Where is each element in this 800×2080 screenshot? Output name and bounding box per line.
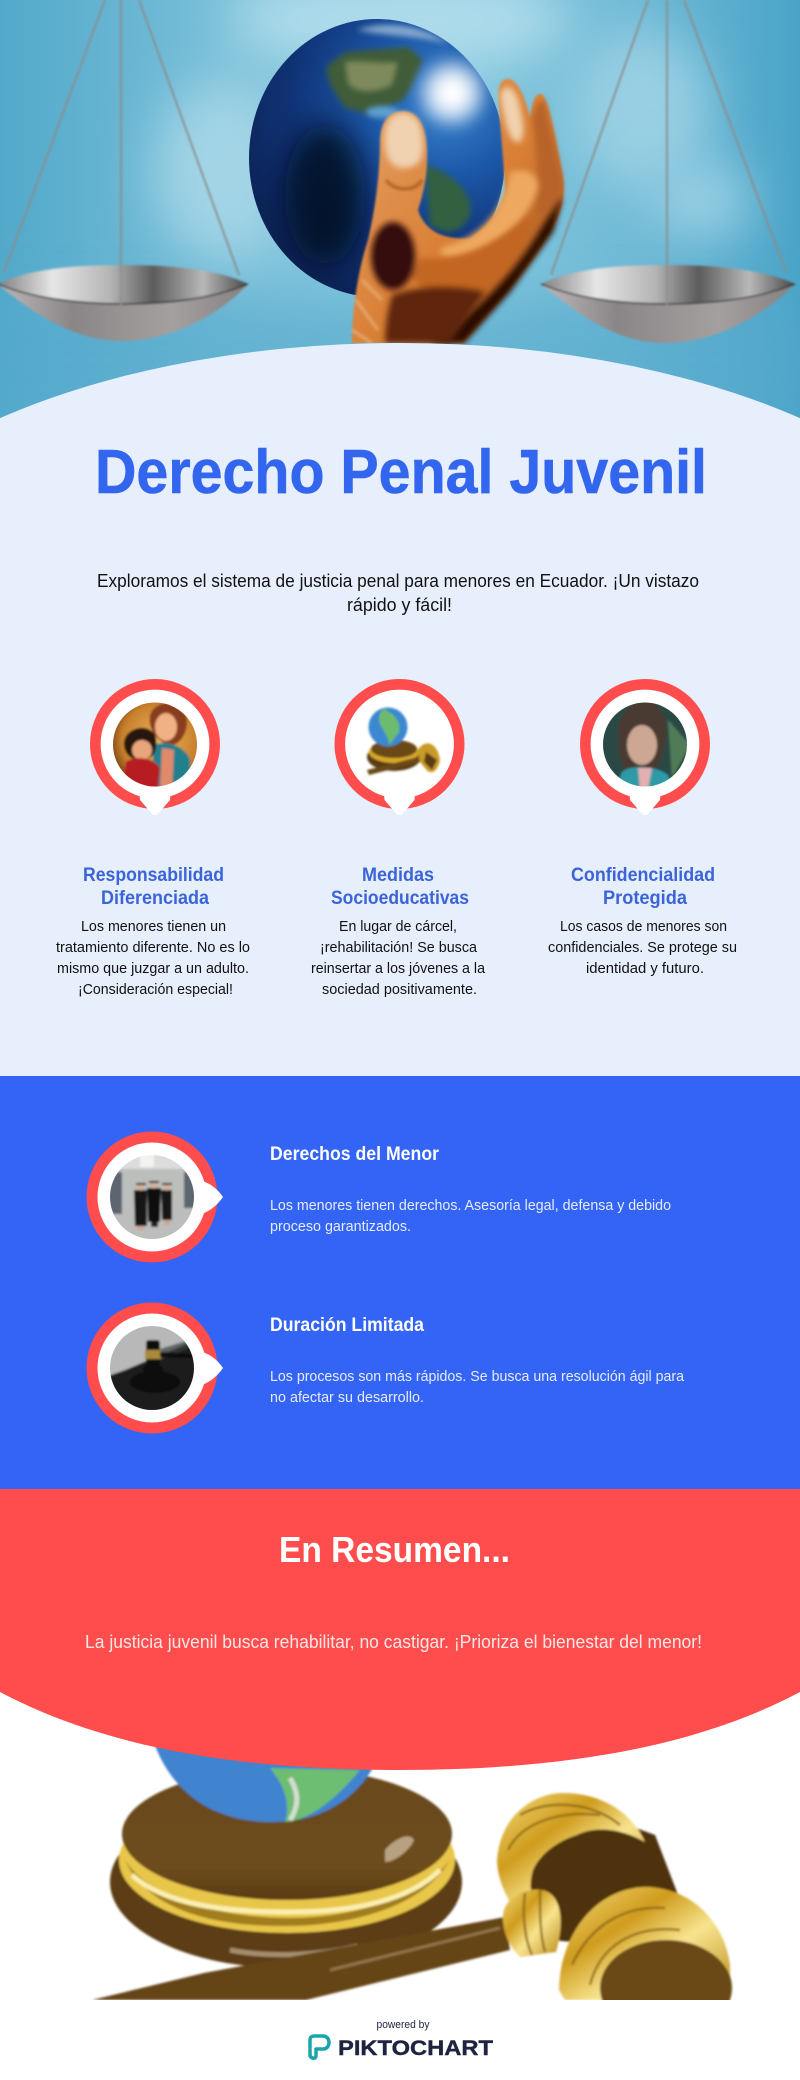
block heading: Derechos del Menor <box>270 1144 440 1165</box>
icon: gavel portrait <box>92 1308 223 1428</box>
column: Medidas Socioeducativas <box>311 865 486 998</box>
title: Derecho Penal Juvenil <box>95 438 707 507</box>
column body: sociedad positivamente. <box>322 981 477 998</box>
intro text: Exploramos el sistema de justicia penal para menores en Ecuador. ¡Un vistazo <box>97 570 699 591</box>
column heading <box>571 865 715 909</box>
left scale pan <box>0 0 248 341</box>
column heading: Medidas <box>362 865 434 886</box>
column body: reinsertar a los jóvenes a la <box>311 960 486 977</box>
gavel head <box>495 1791 734 2000</box>
column heading <box>83 865 224 909</box>
footer: powered by: powered by <box>376 2019 430 2031</box>
pin icon: globe on gavel <box>340 684 459 815</box>
column heading <box>331 865 469 909</box>
blue panel background <box>0 1076 800 1490</box>
red summary panel <box>0 1489 800 1770</box>
column body: Los casos de menores son <box>560 918 727 935</box>
summary text: La justicia juvenil busca rehabilitar, no castigar. ¡Prioriza el bienestar del menor! <box>85 1631 702 1652</box>
icon: graduates portrait <box>92 1137 223 1257</box>
curved hero edge <box>0 343 800 418</box>
column: Confidencialidad Protegida <box>548 865 737 977</box>
block and globe <box>110 1740 462 1968</box>
column body: identidad y futuro. <box>586 960 704 977</box>
text: Derechos del Menor <box>270 1144 671 1235</box>
column heading: Socioeducativas <box>331 888 469 909</box>
column body <box>311 918 486 998</box>
column body <box>56 918 250 998</box>
pin icon: children illustration <box>95 684 215 815</box>
column heading: Protegida <box>603 888 687 909</box>
sky background <box>0 0 800 420</box>
column body: Los menores tienen un <box>81 918 226 935</box>
block heading: Duración Limitada <box>270 1315 424 1336</box>
column heading: Confidencialidad <box>571 865 715 886</box>
block body: no afectar su desarrollo. <box>270 1389 424 1406</box>
column heading: Responsabilidad <box>83 865 224 886</box>
text: Duración Limitada <box>270 1315 685 1406</box>
summary heading: En Resumen... <box>279 1529 510 1570</box>
block body: Los procesos son más rápidos. Se busca una resolución ágil para <box>270 1368 685 1385</box>
intro text: rápido y fácil! <box>347 594 452 615</box>
globe <box>249 19 505 296</box>
column body: confidenciales. Se protege su <box>548 939 737 956</box>
column body: En lugar de cárcel, <box>339 918 457 935</box>
pin icon: girl portrait <box>585 684 705 815</box>
gavel handle <box>92 1917 510 2000</box>
column body: ¡Consideración especial! <box>78 981 233 998</box>
column heading: Diferenciada <box>101 888 209 909</box>
lavender intro panel background <box>0 418 800 1076</box>
footer: Piktochart logo: PIKTOCHART <box>338 2037 493 2060</box>
bottom photo: globe on gavel block <box>92 1747 734 2000</box>
column: Responsabilidad Diferenciada <box>56 865 250 998</box>
column body <box>548 918 737 977</box>
block body <box>270 1197 671 1235</box>
right scale pan <box>541 0 795 343</box>
block body <box>270 1368 685 1406</box>
hand holding the globe <box>352 79 564 343</box>
block body: proceso garantizados. <box>270 1218 411 1235</box>
column body: ¡rehabilitación! Se busca <box>320 939 478 956</box>
hero photo: scales and globe in hand <box>0 0 800 418</box>
block body: Los menores tienen derechos. Asesoría legal, defensa y debido <box>270 1197 671 1214</box>
column body: mismo que juzgar a un adulto. <box>57 960 249 977</box>
intro text <box>97 570 699 615</box>
column body: tratamiento diferente. No es lo <box>56 939 250 956</box>
